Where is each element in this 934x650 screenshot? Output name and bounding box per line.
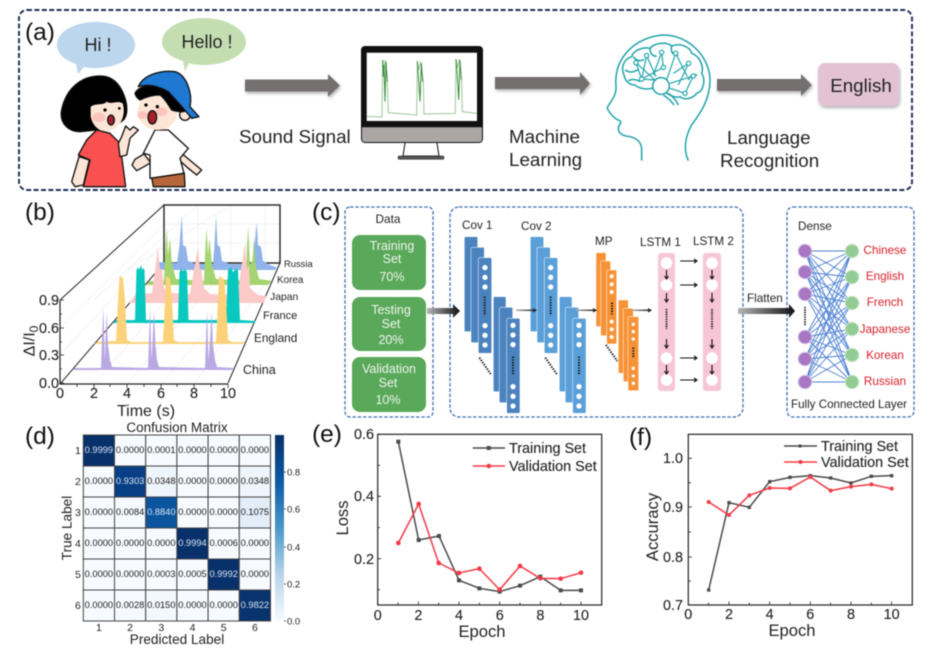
x axis tick labels: 6 [157,386,165,402]
training set block [352,235,426,290]
girl [61,76,138,187]
arrow: data to model [427,304,460,318]
training set block: Set [383,252,402,266]
label: Fully Connected Layer: Fully Connected Layer [791,398,907,411]
x tick labels: 6 [496,608,504,624]
matrix values: 0.0005 [178,569,207,579]
y tick labels: 1.0 [663,451,683,467]
matrix values: 0.0000 [85,507,113,517]
legend [473,441,597,475]
testing set block: Set [382,317,401,331]
matrix values: 0.0000 [209,507,238,517]
output language labels: French [867,296,903,309]
x axis title: Epoch [768,621,816,640]
matrix values: 0.0000 [85,476,113,486]
panel a dashed frame [19,10,912,190]
x axis title: Epoch [458,622,506,641]
label: Flatten: Flatten [747,292,783,305]
predicted label ticks: 4 [190,622,196,634]
speech bubble: Hello: Hello ! [181,32,233,52]
x axis tick labels: 2 [90,386,98,402]
matrix cells [83,435,270,621]
matrix values: 0.1075 [241,507,269,517]
axis ticks [378,434,581,605]
illustration: two children talking [61,71,202,187]
x tick labels: 8 [536,608,544,624]
x axis tick labels: 0 [56,386,64,402]
arrow: to language recognition [717,74,812,96]
matrix values: 0.0000 [147,538,176,548]
matrix values: 0.0000 [209,445,238,455]
layer titles: MP [595,235,613,248]
training loss line [396,440,583,594]
arrow: Cov 1 to Cov 2 [516,308,537,313]
matrix values: 0.9303 [116,476,144,486]
y axis tick labels [39,293,59,392]
y tick labels: 0.2 [354,552,374,568]
predicted label ticks [96,622,258,634]
x tick labels [684,607,900,623]
language axis labels: France [263,310,297,322]
layer titles: LSTM 1 [640,236,681,249]
ellipsis dots [479,297,633,375]
dense input nodes [798,244,812,389]
x tick labels [374,608,589,624]
x tick labels: 0 [374,608,382,624]
matrix values: 0.9999 [85,445,113,455]
dense ellipsis [804,307,806,326]
data box [345,207,433,417]
matrix values: 0.0000 [209,476,238,486]
arrow: flatten [738,304,795,318]
LSTM arrows [664,259,714,382]
output language labels: Japanese [860,323,910,336]
label: Sound Signal: Sound Signal [239,126,351,147]
matrix values: 0.0000 [178,507,207,517]
output language labels: Korean [866,349,904,362]
Cov 1 layers [464,237,520,413]
matrix values: 0.0000 [116,538,144,548]
dense layer box [787,207,914,417]
arrow: to machine learning [495,72,590,95]
predicted label ticks: 1 [96,622,102,634]
x axis title: Time (s) [117,403,175,420]
series: Korea [145,227,272,285]
matrix values: 0.9992 [209,569,238,579]
axis ticks [688,458,892,605]
y tick labels: 0.8 [663,550,683,566]
panel e label: (e) [312,421,342,448]
matrix values: 0.0000 [241,538,269,548]
matrix values: 0.0028 [116,600,144,610]
matrix values: 0.0000 [116,445,144,455]
arrow: MP to LSTM [632,308,652,313]
y tick labels: 0.6 [354,427,374,443]
label: Dense: Dense [798,220,832,233]
output language labels [860,244,910,388]
colour bar: 0.8 [287,468,300,478]
y tick labels [354,427,374,568]
x tick labels: 2 [414,608,422,624]
y axis title: Loss [333,500,352,536]
x tick labels: 6 [806,607,814,623]
matrix values [85,445,269,610]
validation set block [352,357,426,412]
matrix values: 0.0348 [147,476,176,486]
x tick labels: 8 [847,607,855,623]
language axis labels: Korea [277,275,304,286]
Cov 2 layers [530,237,586,413]
panel a label: (a) [25,19,55,46]
panel b label: (b) [25,199,55,226]
label: Machine Learning: Machine [509,126,580,147]
validation set block: 10% [375,393,401,407]
matrix values: 0.0000 [178,600,207,610]
matrix values: 0.9994 [178,538,207,548]
x tick labels: 2 [725,607,733,623]
colour bar: 0.2 [287,580,300,590]
y axis tick labels: 0.3 [39,348,59,364]
matrix values: 0.8840 [147,507,176,517]
validation accuracy line [707,475,894,517]
data box: Data [376,212,401,226]
3D axes frame [60,205,280,388]
y tick labels: 0.4 [354,489,374,505]
matrix values: 0.0000 [241,569,269,579]
x tick labels: 10 [884,607,900,623]
language axis labels [243,258,313,377]
panel f: accuracy chart [629,424,912,640]
matrix title: Confusion Matrix [126,420,228,435]
x axis tick labels: 4 [123,386,131,402]
panel a: speech to language pipeline [19,10,912,190]
x tick labels: 4 [455,608,463,624]
x axis tick labels [56,386,236,402]
matrix values: 0.0000 [178,476,207,486]
y axis tick labels: 0.0 [39,376,59,392]
layer titles: Cov 1 [462,219,493,232]
predicted label ticks: 2 [127,622,133,634]
dense output nodes [845,244,859,389]
panel e: loss chart [312,421,602,641]
output language labels: Chinese [864,244,906,257]
model box [450,207,743,417]
panel d: confusion matrix [25,420,300,647]
matrix values: 0.0150 [147,600,176,610]
output box: English [818,63,899,106]
matrix values: 0.0006 [209,538,238,548]
matrix values: 0.0000 [85,600,113,610]
colour bar: 0.6 [287,504,300,516]
validation loss line [396,502,583,592]
legend: Validation Set [821,455,909,471]
label: Machine Learning [509,126,582,170]
series: China [72,308,234,370]
true label ticks: 3 [75,507,81,519]
colour bar: 0.0 [287,616,300,628]
convolution and pooling layers [464,237,639,413]
matrix values: 0.0003 [147,569,176,579]
label: Machine Learning: Learning [509,149,582,170]
x tick labels: 10 [573,608,589,624]
training set block: Training [370,239,414,253]
validation set block: Validation [362,362,416,376]
matrix values: 0.0000 [178,445,207,455]
layer titles: Cov 2 [521,220,552,233]
true label ticks [75,445,81,612]
layer nodes [482,265,635,409]
x axis tick labels: 10 [220,386,236,402]
axes frame [378,434,602,605]
y axis title: True Label [60,496,74,560]
legend: Validation Set [509,459,597,475]
matrix values: 0.0000 [85,538,113,548]
panel b: 3D waterfall signals [22,199,313,420]
x tick labels: 0 [684,607,692,623]
matrix values: 0.0000 [85,569,113,579]
language axis labels: Japan [270,292,299,303]
speech bubble: Hi: Hi ! [84,35,112,55]
training set block: 70% [379,270,405,284]
y axis tick labels: 0.6 [39,321,59,337]
matrix values: 0.0348 [241,476,269,486]
y axis title: Accuracy [643,492,662,561]
true label ticks: 4 [75,538,81,550]
y tick labels: 0.7 [663,598,683,614]
testing set block: 20% [378,333,404,347]
MP layers [596,253,639,391]
testing set block [352,297,426,351]
colour bar [275,435,300,628]
x axis title: Predicted Label [130,632,224,647]
speech bubble: Hello [162,18,246,71]
axes frame [688,434,912,605]
matrix values: 0.9822 [241,600,269,610]
predicted label ticks: 5 [221,622,227,634]
fully connected links [805,251,852,382]
series: Russia [158,215,278,270]
output language labels: English [866,270,904,283]
testing set block: Testing [371,303,411,317]
layer titles [462,219,734,249]
matrix values: 0.0000 [116,569,144,579]
panel c: network architecture [312,199,914,417]
language axis labels: China [243,363,276,377]
label: Language Recognition: Language [727,127,811,148]
matrix values: 0.0000 [209,600,238,610]
legend [784,439,909,471]
LSTM 2 column [703,253,721,391]
series: France [113,265,256,323]
speech bubble: Hi [57,22,135,74]
predicted label ticks: 3 [158,622,164,634]
legend: Training Set [821,439,898,455]
monitor with signal trace [361,46,483,159]
true label ticks: 6 [75,600,81,612]
language axis labels: Russia [284,258,313,269]
y axis title: 0 [27,325,41,332]
boy [132,71,202,187]
legend: Training Set [509,441,586,457]
series: Japan [129,243,266,303]
true label ticks: 2 [75,476,81,488]
matrix values: 0.0084 [116,507,144,517]
language axis labels: England [254,331,297,345]
output language labels: Russian [864,375,906,388]
validation set block: Set [379,376,398,390]
layer titles: LSTM 2 [693,235,734,248]
series: England [94,276,245,344]
training accuracy line [707,474,893,592]
x tick labels: 4 [766,607,774,623]
output box: English: English [830,75,892,96]
predicted label ticks: 6 [252,622,258,634]
y tick labels [663,451,683,614]
arrow: Cov 2 to MP [576,308,597,313]
y axis title: ΔI/I [22,332,38,356]
x axis tick labels: 8 [190,386,198,402]
matrix values: 0.0000 [241,445,269,455]
icon: head with neural network brain [607,35,710,161]
label: Language Recognition [720,127,819,171]
label: Language Recognition: Recognition [720,150,819,171]
panel f label: (f) [629,424,652,451]
y tick labels: 0.9 [663,500,683,516]
colour bar: 0.4 [287,542,300,554]
LSTM 1 column [658,253,675,391]
true label ticks: 1 [75,445,81,457]
arrow: to sound signal [245,74,340,97]
y axis tick labels: 0.9 [39,293,59,309]
true label ticks: 5 [75,569,81,581]
panel d label: (d) [25,423,55,450]
matrix values: 0.0001 [147,445,176,455]
panel c label: (c) [312,199,341,226]
